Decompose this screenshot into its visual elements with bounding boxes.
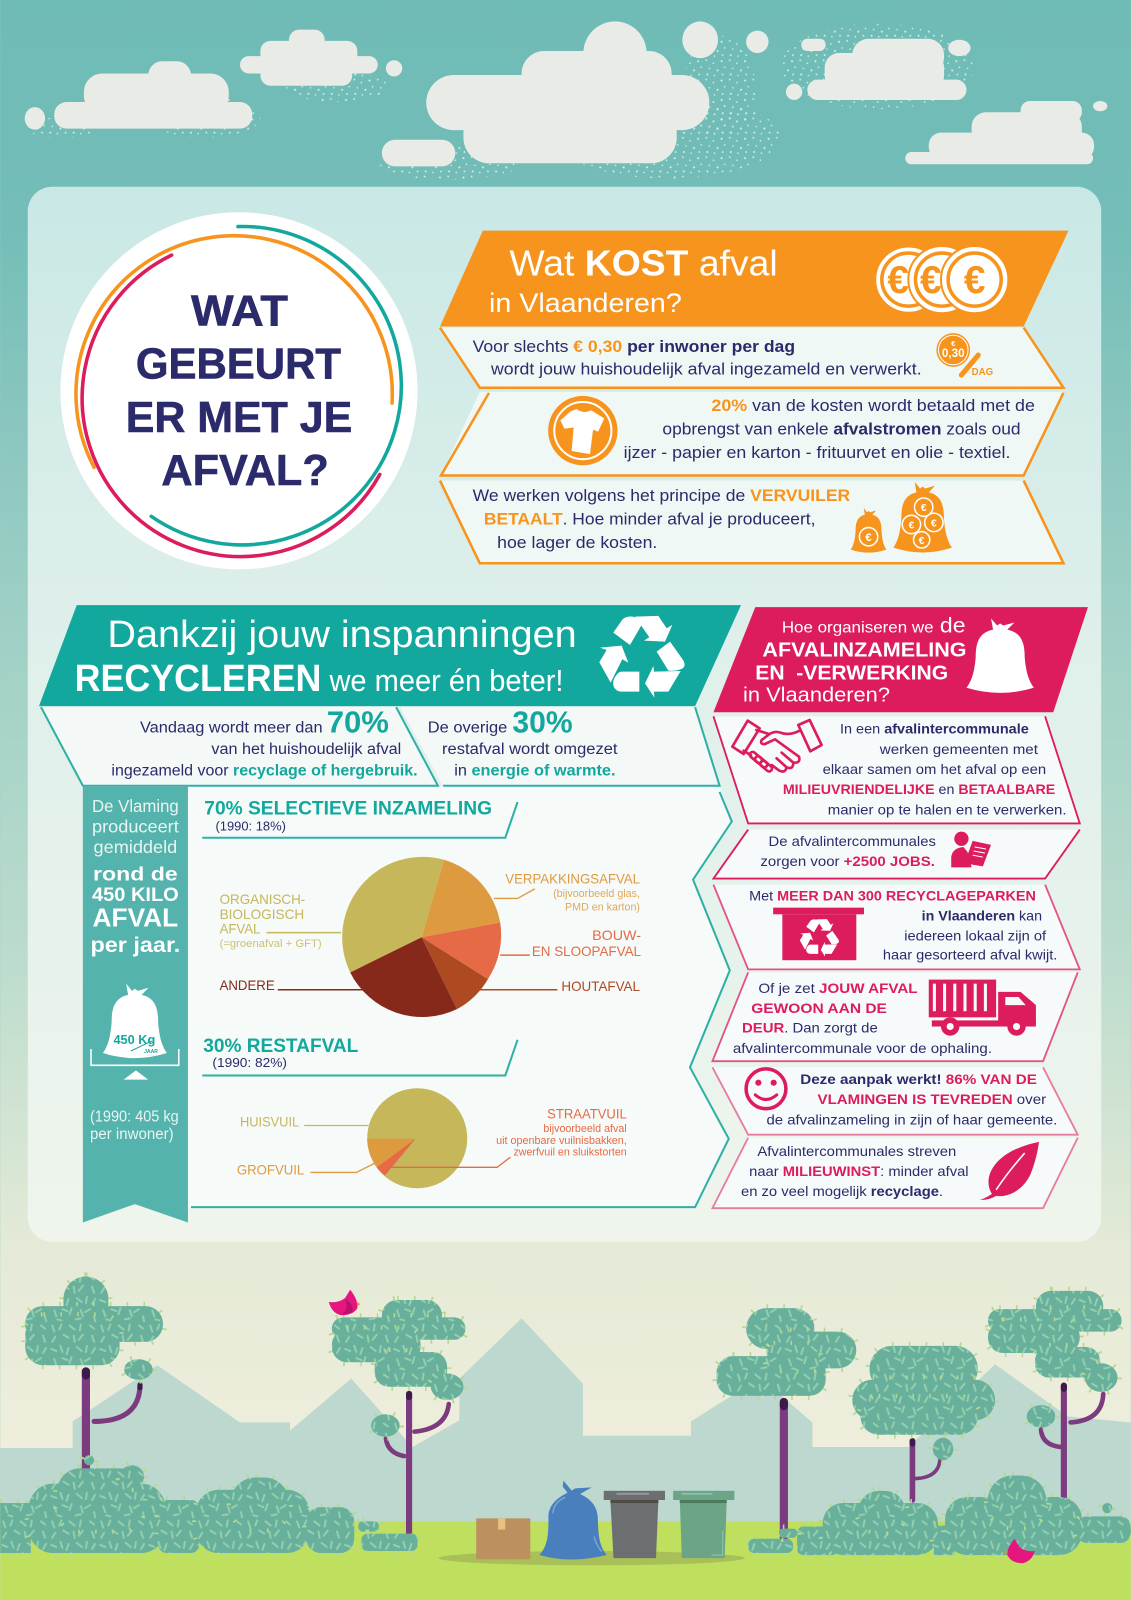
label: organisch-biologisch: BIOLOGISCH bbox=[220, 907, 304, 923]
label: andere: ANDERE bbox=[220, 978, 275, 994]
tree 2 bbox=[332, 1300, 466, 1437]
heading: restafval: 30% RESTAFVAL bbox=[203, 1035, 359, 1057]
icon: smiley bbox=[746, 1069, 786, 1109]
banner heading: in Vlaanderen? bbox=[489, 288, 682, 318]
icon: euro coins: € bbox=[964, 259, 985, 302]
row: 20%: ijzer - papier en karton - frituurvet en olie - textiel. bbox=[624, 443, 1010, 462]
orange banner bbox=[440, 231, 1069, 327]
banner heading bbox=[75, 613, 577, 699]
row: aan de deur bbox=[712, 972, 1078, 1061]
title text: GEBEURT bbox=[136, 340, 341, 389]
bird 1 bbox=[329, 1290, 360, 1315]
row: 0,30 euro: Voor slechts € 0,30 per inwoner per dag bbox=[473, 337, 795, 356]
label: verpakkingsafval: PMD en karton) bbox=[565, 902, 640, 914]
icon: weighed bag: 450 Kg bbox=[113, 1032, 155, 1047]
box: 70 percent bbox=[41, 706, 438, 786]
row: tevreden: Deze aanpak werkt! 86% VAN DE bbox=[800, 1072, 1037, 1088]
cardboard box bbox=[476, 1518, 530, 1559]
box: 30 percent: 30% bbox=[512, 706, 573, 740]
label: houtafval: HOUTAFVAL bbox=[561, 979, 640, 995]
row: tevreden bbox=[712, 1067, 1078, 1135]
row: aan de deur: DEUR. Dan zorgt de bbox=[742, 1021, 878, 1037]
row: milieuwinst: en zo veel mogelijk recyclage. bbox=[741, 1184, 943, 1200]
box: 30 percent bbox=[400, 706, 720, 786]
ribbon: 450 kilo: per jaar. bbox=[91, 933, 180, 957]
label: huisvuil bbox=[240, 1115, 369, 1131]
label: grofvuil bbox=[237, 1162, 375, 1178]
icon: coin per day: DAG bbox=[972, 367, 993, 378]
icon: recycling container bbox=[773, 908, 864, 960]
panel: recycleren bbox=[39, 605, 741, 1222]
zigzag outline bbox=[191, 792, 732, 1207]
ribbon: 450 kilo: AFVAL bbox=[93, 905, 178, 933]
title text: AFVAL? bbox=[161, 446, 329, 495]
box: 30 percent: in energie of warmte. bbox=[454, 763, 616, 780]
row: afvalintercommunale: werken gemeenten met bbox=[879, 742, 1038, 758]
ribbon: 450 kilo bbox=[83, 786, 188, 1222]
bushes right bbox=[748, 1476, 1131, 1555]
heading: restafval: (1990: 82%) bbox=[212, 1055, 287, 1070]
box: 30 percent: restafval wordt omgezet bbox=[442, 741, 618, 758]
row: aan de deur: GEWOON AAN DE bbox=[751, 1001, 887, 1017]
bird 2 bbox=[1004, 1539, 1035, 1563]
label: straatvuil: bijvoorbeeld afval bbox=[543, 1123, 627, 1135]
label: organisch-biologisch bbox=[220, 892, 341, 950]
row: recyclageparken: in Vlaanderen kan bbox=[922, 908, 1042, 924]
pie chart: selectieve inzameling bbox=[220, 857, 641, 1017]
body background bbox=[188, 786, 732, 1207]
icon: leaf bbox=[980, 1142, 1039, 1200]
row: vervuiler betaalt: We werken volgens het principe de VERVUILER bbox=[473, 486, 850, 505]
icon: truck bbox=[929, 980, 1036, 1036]
row: milieuwinst bbox=[712, 1138, 1078, 1208]
cloud right bbox=[786, 39, 971, 100]
title text: WAT bbox=[191, 287, 288, 336]
teal banner bbox=[39, 605, 741, 706]
label: huisvuil: HUISVUIL bbox=[240, 1115, 299, 1131]
banner heading: Dankzij jouw inspanningen bbox=[107, 613, 577, 655]
tree 3 bbox=[717, 1308, 856, 1396]
cloud centre bbox=[382, 21, 769, 166]
cloud left bbox=[25, 61, 252, 130]
row: jobs: zorgen voor +2500 JOBS. bbox=[760, 854, 935, 870]
ribbon: 450 kilo: rond de bbox=[93, 864, 178, 886]
panel: kost afval bbox=[440, 231, 1069, 563]
row: recyclageparken: Met MEER DAN 300 RECYCLAGEPARKEN bbox=[749, 889, 1036, 905]
ribbon: 450 kilo: (1990: 405 kg bbox=[90, 1108, 179, 1125]
row: 0,30 euro: wordt jouw huishoudelijk afval ingezameld en verwerkt. bbox=[490, 359, 922, 378]
shadow under bins bbox=[438, 1551, 745, 1565]
icon: money bags bbox=[851, 482, 952, 553]
banner heading: in Vlaanderen? bbox=[743, 685, 890, 707]
panel: afvalinzameling bbox=[712, 607, 1088, 1208]
grey bin bbox=[604, 1491, 665, 1558]
tree 1 bbox=[25, 1277, 163, 1380]
title text bbox=[126, 287, 352, 495]
row: 20%: opbrengst van enkele afvalstromen zoals oud bbox=[662, 420, 1021, 439]
box: 70 percent: 70% bbox=[327, 706, 389, 740]
ribbon: 450 kilo: per inwoner) bbox=[90, 1126, 174, 1143]
row: afvalintercommunale bbox=[713, 716, 1080, 823]
label: organisch-biologisch: ORGANISCH- bbox=[220, 892, 306, 908]
heading: restafval bbox=[202, 1035, 518, 1076]
row: 20% bbox=[441, 392, 1063, 476]
title circle bbox=[60, 212, 418, 569]
icon: weighed bag: JAAR bbox=[144, 1049, 158, 1055]
banner heading: Hoe organiseren we de bbox=[782, 614, 966, 638]
label: straatvuil: STRAATVUIL bbox=[547, 1106, 627, 1122]
grass bbox=[0, 1521, 1131, 1600]
label: straatvuil bbox=[388, 1106, 627, 1167]
row: 20%: 20% van de kosten wordt betaald met de bbox=[711, 396, 1035, 415]
row: tevreden: VLAMINGEN IS TEVREDEN over bbox=[818, 1092, 1046, 1108]
row: aan de deur: afvalintercommunale voor de ophaling. bbox=[733, 1041, 992, 1057]
banner heading: AFVALINZAMELING bbox=[762, 640, 967, 662]
icon: weighed bag bbox=[91, 984, 179, 1080]
heading: selectieve inzameling: 70% SELECTIEVE INZAMELING bbox=[204, 797, 492, 819]
row: jobs bbox=[713, 830, 1080, 879]
ribbon: 450 kilo: produceert bbox=[92, 817, 179, 837]
row: milieuwinst: Afvalintercommunales streven bbox=[757, 1144, 956, 1160]
tree 5 bbox=[988, 1291, 1122, 1428]
clouds bbox=[25, 21, 1107, 180]
icon: money bags: € bbox=[921, 503, 927, 514]
trunks and branches bbox=[86, 1371, 1103, 1541]
icon: white bag bbox=[967, 618, 1034, 693]
row: tevreden: de afvalinzameling in zijn of haar gemeente. bbox=[767, 1112, 1057, 1128]
row: aan de deur: Of je zet JOUW AFVAL bbox=[758, 981, 918, 997]
icon: handshake bbox=[732, 720, 822, 773]
icon: coin per day: € bbox=[951, 339, 956, 348]
row: vervuiler betaalt bbox=[440, 481, 1063, 563]
banner heading bbox=[489, 244, 778, 318]
icon: coin per day bbox=[937, 334, 993, 378]
row: milieuwinst: naar MILIEUWINST: minder afval bbox=[749, 1164, 969, 1180]
label: grofvuil: GROFVUIL bbox=[237, 1162, 304, 1178]
icon: money bags: € bbox=[919, 536, 925, 547]
box: 70 percent: van het huishoudelijk afval bbox=[211, 741, 401, 758]
main panel bbox=[28, 187, 1101, 1242]
row: afvalintercommunale: elkaar samen om het afval op een bbox=[823, 762, 1046, 778]
box: 70 percent: ingezameld voor recyclage of hergebruik. bbox=[111, 763, 418, 780]
row: vervuiler betaalt: BETAALT. Hoe minder afval je produceert, bbox=[484, 509, 816, 528]
row: 0,30 euro bbox=[440, 328, 1063, 388]
label: straatvuil: zwerfvuil en sluikstorten bbox=[513, 1147, 627, 1159]
icon: t-shirt bbox=[548, 396, 618, 465]
teal arc bbox=[151, 226, 401, 545]
label: bouw: EN SLOOPAFVAL bbox=[532, 944, 641, 960]
row: recyclageparken: iedereen lokaal zijn of bbox=[904, 928, 1046, 944]
heading: selectieve inzameling: (1990: 18%) bbox=[216, 819, 286, 834]
heading: selectieve inzameling bbox=[202, 797, 518, 838]
trees foliage bbox=[0, 1277, 1131, 1555]
ribbon: 450 kilo: 450 KILO bbox=[92, 884, 179, 906]
cloud upper left bbox=[240, 30, 402, 86]
row: recyclageparken bbox=[713, 885, 1080, 969]
icon: coin per day: 0,30 bbox=[942, 347, 965, 360]
banner heading: RECYCLEREN we meer én beter! bbox=[75, 657, 563, 699]
icon: money bags: € bbox=[909, 521, 915, 532]
row: afvalintercommunale: manier op te halen en te verwerken. bbox=[828, 802, 1067, 818]
box: 70 percent: Vandaag wordt meer dan bbox=[140, 720, 323, 737]
label: verpakkingsafval: (bijvoorbeeld glas, bbox=[553, 888, 640, 900]
label: organisch-biologisch: (=groenafval + GFT) bbox=[220, 938, 322, 950]
pie chart: restafval bbox=[237, 1088, 627, 1188]
label: verpakkingsafval bbox=[494, 872, 640, 914]
orange arc bbox=[76, 236, 392, 467]
label: verpakkingsafval: VERPAKKINGSAFVAL bbox=[505, 872, 640, 888]
banner heading: Wat KOST afval bbox=[509, 244, 778, 284]
bushes left bbox=[0, 1455, 418, 1553]
ribbon: 450 kilo: De Vlaming bbox=[92, 796, 179, 816]
row: recyclageparken: haar gesorteerd afval kwijt. bbox=[883, 948, 1057, 964]
green bin bbox=[673, 1491, 734, 1558]
title text: ER MET JE bbox=[126, 393, 352, 442]
houses silhouette bbox=[0, 1318, 1131, 1531]
icon: euro coins bbox=[876, 246, 1008, 313]
label: bouw bbox=[500, 928, 641, 960]
banner heading: EN -VERWERKING bbox=[755, 663, 948, 685]
icon: money bags: € bbox=[931, 519, 937, 530]
ribbon: 450 kilo: gemiddeld bbox=[94, 837, 177, 857]
banner heading bbox=[743, 614, 967, 707]
icon: recycling symbol bbox=[599, 616, 685, 698]
row: jobs: De afvalintercommunales bbox=[769, 834, 936, 850]
row: afvalintercommunale: In een afvalintercommunale bbox=[840, 722, 1029, 738]
cloud far right bbox=[905, 101, 1107, 164]
label: straatvuil: uit openbare vuilnisbakken, bbox=[496, 1135, 627, 1147]
icon: euro coins: € bbox=[920, 259, 942, 302]
pink banner bbox=[713, 607, 1088, 712]
blue bag bbox=[539, 1481, 607, 1559]
box: 30 percent: De overige bbox=[428, 720, 508, 737]
label: bouw: BOUW- bbox=[592, 928, 641, 944]
icon: worker bbox=[951, 832, 991, 867]
icon: euro coins: € bbox=[887, 259, 909, 302]
icon: money bags: € bbox=[865, 532, 872, 544]
label: organisch-biologisch: AFVAL bbox=[220, 922, 260, 938]
row: vervuiler betaalt: hoe lager de kosten. bbox=[497, 533, 657, 552]
row: afvalintercommunale: MILIEUVRIENDELIJKE en BETAALBARE bbox=[783, 782, 1055, 798]
pink arc bbox=[82, 255, 380, 557]
tree 4 bbox=[852, 1346, 995, 1460]
